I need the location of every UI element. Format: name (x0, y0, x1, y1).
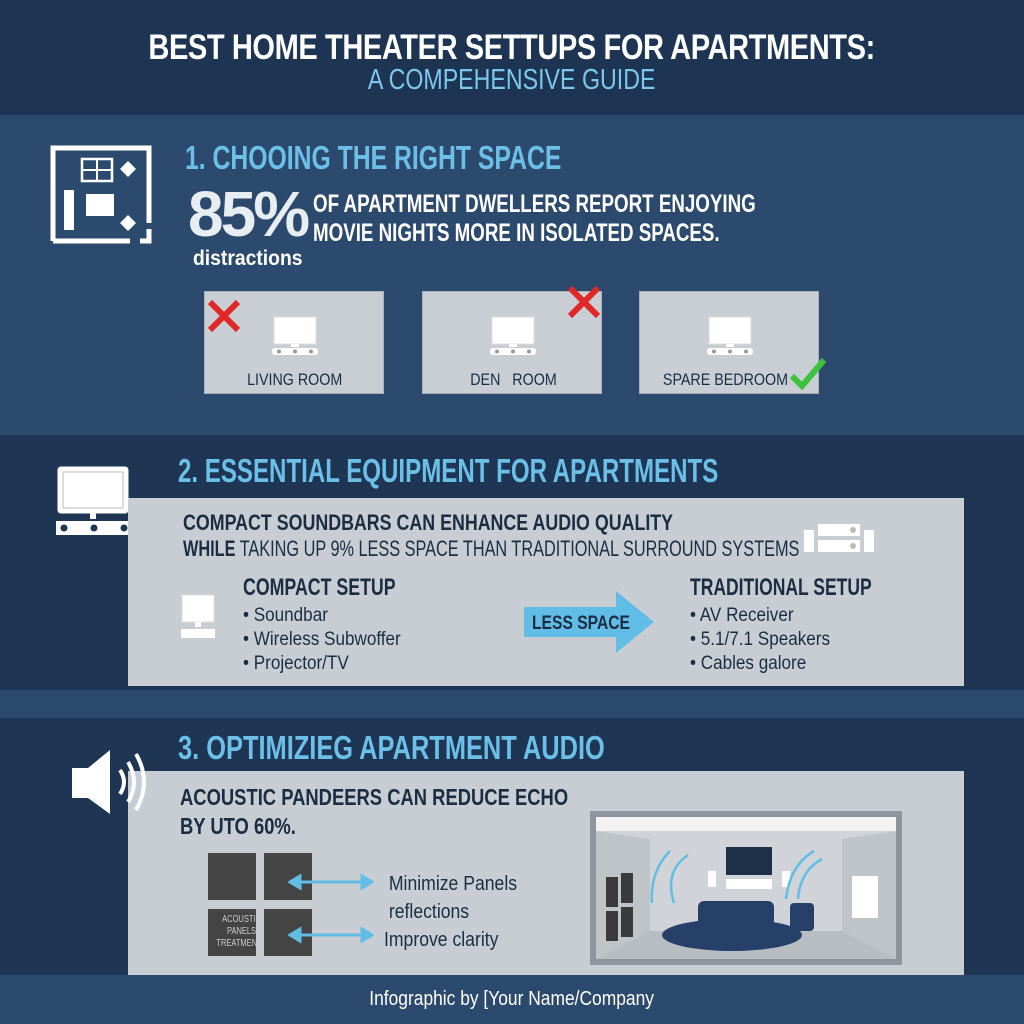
divider band (0, 690, 1024, 718)
benefits text: Minimize Panels (389, 873, 517, 895)
card: den room (422, 291, 602, 394)
compact setup list: • Projector/TV (243, 653, 349, 674)
section 1 background (0, 115, 1024, 435)
icon: red x den (568, 286, 600, 318)
stat text: MOVIE NIGHTS MORE IN ISOLATED SPACES. (313, 219, 720, 247)
stat text (313, 190, 756, 247)
echo claim: ACOUSTIC PANDEERS CAN REDUCE ECHO (180, 784, 568, 810)
distractions: distractions (193, 247, 303, 270)
claim text (183, 510, 799, 561)
panel: audio (128, 771, 964, 975)
compact setup list: COMPACT SETUP (243, 574, 396, 601)
card: spare bedroom (639, 291, 819, 394)
benefits text: Improve clarity (384, 929, 498, 951)
traditional setup list (690, 574, 872, 674)
traditional setup list: • Cables galore (690, 653, 806, 674)
echo claim: BY UTO 60%. (180, 813, 296, 839)
traditional setup list: • AV Receiver (690, 605, 794, 626)
traditional setup list: TRADITIONAL SETUP (690, 574, 872, 601)
icon: green check (790, 358, 826, 390)
compact setup list (243, 574, 401, 674)
stat 85%: 85% (188, 178, 307, 250)
section 2 (0, 435, 1024, 690)
icon: small tv (181, 594, 215, 638)
compact setup list: • Soundbar (243, 605, 328, 626)
compact setup list: • Wireless Subwoffer (243, 629, 401, 650)
arrow: less space: LESS SPACE (532, 613, 630, 634)
title: BEST HOME THEATER SETTUPS FOR APARTMENTS: (149, 28, 875, 67)
icon: red x living (208, 300, 240, 332)
credit: Infographic by [Your Name/Company (370, 988, 654, 1010)
acoustic panels (208, 853, 312, 956)
icon: speaker (72, 750, 146, 814)
subtitle: A COMPEHENSIVE GUIDE (368, 64, 656, 96)
arrows (288, 874, 374, 944)
arrow: less space (524, 591, 654, 653)
acoustic panels: PANELS (227, 926, 256, 937)
stat text: OF APARTMENT DWELLERS REPORT ENJOYING (313, 190, 756, 218)
icon: tv & speaker (56, 466, 128, 535)
benefits text: reflections (389, 901, 469, 923)
card: den room: DEN ROOM (470, 370, 556, 389)
claim text: COMPACT SOUNDBARS CAN ENHANCE AUDIO QUALITY (183, 510, 673, 535)
footer (0, 975, 1024, 1024)
heading 3: 3. OPTIMIZIEG APARTMENT AUDIO (178, 729, 605, 766)
card: living room: LIVING ROOM (247, 370, 343, 389)
section 3 (0, 718, 1024, 975)
echo claim (180, 784, 568, 839)
icon: receiver (804, 524, 874, 552)
benefits text (384, 873, 517, 951)
card: living room (204, 291, 384, 394)
traditional setup list: • 5.1/7.1 Speakers (690, 629, 830, 650)
heading 2: 2. ESSENTIAL EQUIPMENT FOR APARTMENTS (178, 452, 718, 489)
claim text: WHILE TAKING UP 9% LESS SPACE THAN TRADITIONAL SURROUND SYSTEMS (183, 536, 799, 561)
icon: floor plan (50, 146, 152, 244)
heading 1: 1. CHOOING THE RIGHT SPACE (185, 139, 561, 176)
room illustration (590, 811, 902, 965)
panel: equipment (128, 498, 964, 686)
header band (0, 0, 1024, 115)
card: spare bedroom: SPARE BEDROOM (662, 370, 788, 389)
